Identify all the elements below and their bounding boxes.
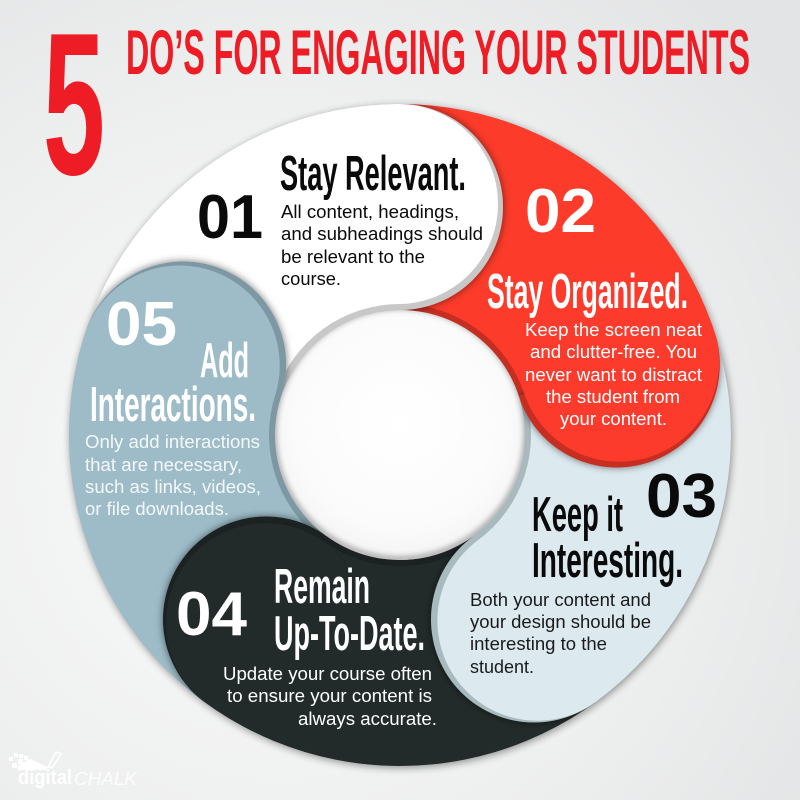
step 03 text (470, 462, 717, 677)
body 02: your content. (560, 409, 667, 429)
body 04 (223, 664, 437, 729)
body 04: Update your course often (223, 664, 432, 684)
icon: chalk stroke with pixel squares (9, 752, 61, 770)
heading 01: Stay Relevant. (280, 147, 466, 201)
body 01: and subheadings should (281, 224, 483, 244)
body 01: be relevant to the (281, 247, 425, 267)
centre circle (274, 307, 526, 560)
heading 04 (274, 560, 425, 661)
panel 01 shape: white (85, 104, 503, 396)
body 05: or file downloads. (85, 499, 229, 519)
panel 03 shape: pale blue (431, 333, 731, 722)
body 01: course. (281, 269, 341, 289)
body 02 (525, 320, 702, 429)
panel 05 shape: blue-grey (69, 262, 326, 703)
heading 03: Keep it (532, 488, 623, 542)
heading 03 (532, 488, 683, 588)
heading 05: Add (200, 334, 249, 388)
ring of five panels (69, 104, 731, 766)
heading 04: Up-To-Date. (274, 607, 425, 661)
body 04: to ensure your content is (227, 686, 432, 706)
body 01 (281, 202, 483, 289)
number 04: 04 (176, 580, 248, 649)
body 03: your design should be (470, 612, 651, 632)
panel 04 shape: charcoal (163, 516, 595, 766)
body 03: student. (470, 657, 534, 677)
body 05: that are necessary, (85, 455, 242, 475)
step 02 text (487, 177, 702, 429)
number 02: 02 (525, 177, 596, 246)
heading 03: Interesting. (532, 534, 683, 588)
logo: digitalCHALK (9, 752, 138, 789)
body 02: and clutter-free. You (530, 342, 697, 362)
panel 02 head overlapping panel 03 (519, 322, 725, 473)
number 03: 03 (646, 462, 717, 531)
body 03: interesting to the (470, 634, 607, 654)
body 02: never want to distract (525, 365, 702, 385)
body 03: Both your content and (470, 590, 651, 610)
body 04: always accurate. (298, 709, 437, 729)
heading 04: Remain (274, 560, 370, 614)
body 05 (85, 432, 261, 519)
heading 05 (90, 334, 256, 432)
logo wordmark CHALK: CHALK (74, 769, 138, 789)
step 01 text (197, 147, 483, 289)
panel 02 shape: red (402, 104, 722, 396)
heading 05: Interactions. (90, 378, 256, 432)
body 03 (470, 590, 651, 677)
body 05: Only add interactions (85, 432, 260, 452)
body 02: Keep the screen neat (525, 320, 702, 340)
body 05: such as links, videos, (85, 477, 261, 497)
number 01: 01 (197, 183, 263, 252)
step 04 text (176, 560, 437, 729)
body 02: the student from (546, 387, 680, 407)
number 05: 05 (106, 290, 177, 359)
step 05 text (85, 290, 261, 519)
logo wordmark digital: digital (18, 767, 72, 789)
body 01: All content, headings, (281, 202, 459, 222)
